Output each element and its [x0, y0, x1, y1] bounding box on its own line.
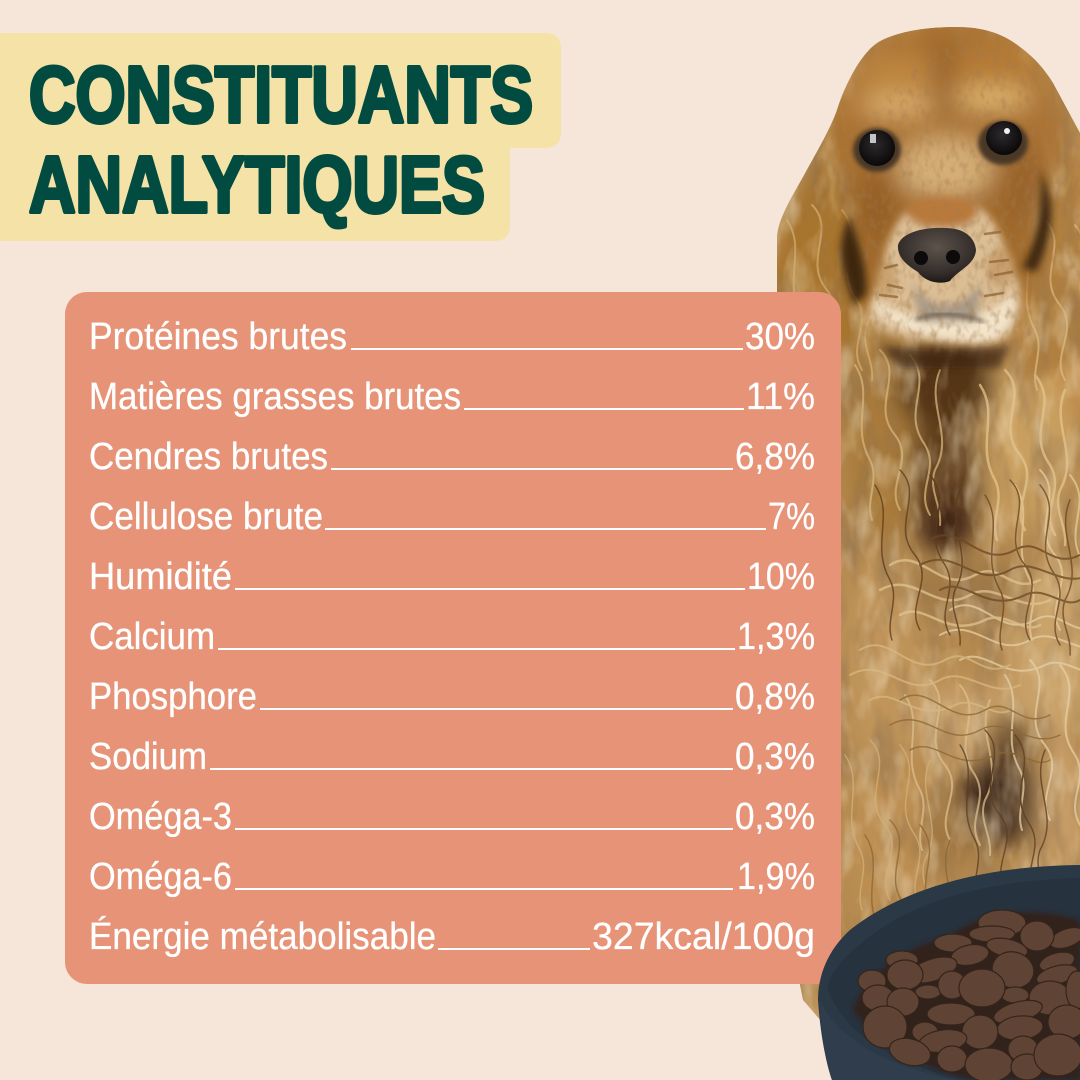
row: Calcium	[89, 616, 815, 658]
row: Énergie métabolisable	[89, 915, 815, 958]
row: Matières grasses brutes: 11%	[746, 376, 815, 418]
row: Protéines brutes	[89, 316, 815, 358]
row: Cellulose brute: 7%	[768, 496, 815, 538]
bowl of kibble	[818, 865, 1080, 1080]
kibble pile	[853, 910, 1080, 1080]
bowl body	[818, 865, 1080, 1080]
dog muzzle shadows	[841, 170, 1051, 368]
fur texture overlays	[779, 28, 1080, 906]
row: Énergie métabolisable: Énergie métabolisable	[89, 915, 436, 958]
dog head	[820, 15, 1080, 352]
row: Cellulose brute	[89, 496, 815, 538]
dog body fur	[770, 20, 1080, 1040]
row: Matières grasses brutes	[89, 376, 815, 418]
row: Phosphore: Phosphore	[89, 676, 257, 718]
bowl front wall	[820, 1000, 958, 1080]
dog nose	[898, 228, 976, 283]
row: Cellulose brute: Cellulose brute	[89, 496, 323, 538]
row: Oméga-3: Oméga-3	[89, 796, 232, 838]
dog ears	[770, 100, 1080, 385]
row: Sodium	[89, 736, 815, 778]
dog fur strands	[787, 205, 1080, 995]
row: Humidité: 10%	[747, 556, 815, 598]
row: Cendres brutes	[89, 436, 815, 478]
row: Protéines brutes: 30%	[745, 316, 815, 358]
row: Sodium: 0,3%	[735, 736, 815, 778]
row: Cendres brutes: Cendres brutes	[89, 436, 328, 478]
row: Oméga-3	[89, 796, 815, 838]
dog right eye	[978, 121, 1028, 165]
title: CONSTITUANTS ANALYTIQUES	[29, 50, 533, 229]
row: Oméga-6: Oméga-6	[89, 856, 232, 898]
dog left eye	[853, 128, 901, 172]
panel: analytical constituents table	[65, 292, 841, 984]
title background	[0, 33, 561, 241]
bowl inner wall	[828, 878, 1080, 1080]
row: Oméga-6	[89, 856, 815, 898]
row: Protéines brutes: Protéines brutes	[89, 316, 347, 358]
row: Phosphore: 0,8%	[735, 676, 815, 718]
row: Énergie métabolisable: 327kcal/100g	[592, 916, 815, 958]
row: Sodium: Sodium	[89, 736, 207, 778]
row: Calcium: 1,3%	[737, 616, 815, 658]
row: Humidité: Humidité	[89, 556, 232, 598]
row: Oméga-3: 0,3%	[735, 796, 815, 838]
dog mouth	[915, 314, 985, 322]
title: CONSTITUANTS ANALYTIQUES: CONSTITUANTS	[29, 50, 533, 139]
row: Cendres brutes: 6,8%	[735, 436, 815, 478]
title: CONSTITUANTS ANALYTIQUES: ANALYTIQUES	[29, 140, 485, 229]
row: Matières grasses brutes: Matières grasses brutes	[89, 376, 461, 418]
muzzle	[868, 196, 1021, 345]
row: Phosphore	[89, 676, 815, 718]
dog photo illustration	[770, 15, 1080, 1040]
row: Calcium: Calcium	[89, 616, 215, 658]
row: Oméga-6: 1,9%	[737, 856, 815, 898]
row: Humidité	[89, 556, 815, 598]
